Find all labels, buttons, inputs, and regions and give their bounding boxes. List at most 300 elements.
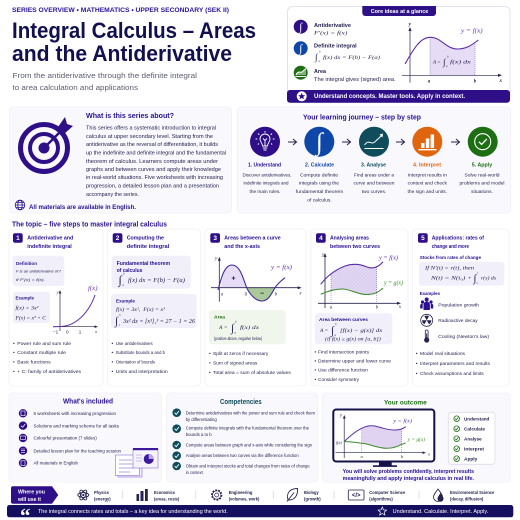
chart: area between curves	[318, 253, 403, 310]
outcome statement: You will solve problems confidently, interpret results	[343, 469, 474, 475]
panel: competencies	[166, 393, 318, 482]
key points list: •	[416, 372, 418, 377]
key points list	[314, 350, 391, 383]
card title: definite integral	[127, 244, 170, 250]
stocks formula box: ∫	[472, 274, 478, 284]
subtitle: From the antiderivative through the definite integral	[12, 73, 198, 80]
key points list: Constant multiple rule	[17, 350, 66, 356]
example box	[111, 294, 196, 328]
icon: antiderivative	[294, 20, 308, 34]
stocks formula box	[419, 262, 504, 286]
example box: ∫	[114, 316, 119, 328]
step 3: analyse	[354, 127, 395, 194]
icon: globe	[15, 200, 25, 210]
panel: core ideas at a glance	[287, 6, 510, 103]
key points list: Total area = sum of absolute values	[213, 370, 291, 376]
checklist: Interpret	[464, 446, 484, 451]
use: computer science	[348, 490, 406, 502]
subtitle: to area calculation and applications	[12, 85, 139, 92]
outcome statement: meaningfully and apply integral calculus in real life.	[343, 476, 475, 482]
monitor with area chart: f(a)	[336, 440, 342, 445]
card title: Antiderivative and	[27, 236, 73, 242]
header: series label, title and subtitle	[12, 8, 256, 92]
step 1: understand: indefinite integrals and	[244, 181, 289, 186]
use: environmental science: (decay, diffusion)	[450, 497, 484, 502]
card title: indefinite integral	[27, 244, 72, 250]
area text: Area	[314, 69, 326, 75]
chart: signed area: +	[231, 276, 236, 282]
step 4: interpret	[408, 127, 448, 194]
use: biology: (growth)	[304, 497, 321, 502]
card title: Computing the	[127, 236, 164, 242]
card title	[27, 236, 73, 250]
checklist: Apply	[464, 456, 478, 461]
step 5: apply	[460, 127, 504, 194]
badge 2: 2	[116, 235, 120, 242]
pennant: where you will use it: Where you	[18, 490, 45, 496]
included item: lesson plan	[19, 446, 121, 455]
step 2: calculate: ∫	[314, 129, 324, 157]
badge 3	[210, 233, 220, 243]
chart: antiderivative curve	[53, 285, 98, 334]
badge 5	[418, 233, 428, 243]
area box: Area	[214, 315, 225, 321]
series description: theorem of calculus. Learners compute areas under	[86, 159, 218, 165]
step 3: analyse: Find areas under a	[354, 173, 395, 178]
step 5: apply: problems and model	[460, 181, 504, 186]
key points list	[209, 351, 291, 376]
icon: definite integral: ∫	[298, 43, 303, 55]
antiderivative text: Antiderivative	[314, 23, 351, 29]
chart: area between curves: x	[398, 305, 402, 310]
stocks formula box: t₀	[476, 280, 478, 284]
competency text: bounds a to b	[186, 432, 212, 437]
panel: learning journey	[238, 107, 510, 213]
key points list: Check assumptions and limits	[420, 371, 484, 377]
area box: f(x) dx	[240, 324, 260, 331]
competency text: by differentiating	[186, 417, 217, 422]
key points list: •	[13, 360, 15, 366]
key points list: •	[209, 362, 211, 367]
use: economics: Economics	[154, 490, 176, 495]
included item: worksheets	[19, 409, 116, 417]
antiderivative text: F′(x) = f(x)	[313, 30, 347, 37]
pennant: where you will use it	[11, 486, 58, 504]
key points list: •	[112, 360, 114, 366]
example: cooling: Cooling (Newton's law)	[438, 334, 489, 340]
key points list: •	[416, 352, 418, 357]
key points list: Orientation of bounds	[116, 360, 155, 366]
included item: lesson plan: Detailed lesson plan for the teaching session	[34, 448, 121, 453]
key points list: •	[13, 342, 15, 347]
step 1: understand	[242, 127, 292, 194]
area box: b	[235, 320, 237, 324]
badge 3: 3	[213, 235, 217, 242]
series description: This series offers a systematic introduction to integral	[86, 126, 216, 132]
check icons	[172, 408, 181, 470]
pennant: where you will use it: will use it	[17, 497, 41, 503]
stocks formula box: r(s) ds	[481, 275, 496, 282]
use: computer science: </>	[352, 493, 361, 499]
key points list: Substitute bounds a and b	[116, 350, 165, 356]
monitor with area chart	[333, 410, 434, 467]
key points list: •	[314, 378, 316, 383]
included item: english	[19, 459, 78, 467]
definition box: F is an antiderivative of f	[16, 269, 61, 274]
chart: signed area: −	[260, 290, 264, 298]
icon: antiderivative: ∫	[298, 22, 303, 34]
slogan band: Understand concepts. Master tools. Apply in context.	[314, 94, 465, 100]
chart: antiderivative curve: −1	[53, 330, 59, 334]
fundamental theorem box: b	[123, 272, 125, 276]
chart: antiderivative curve: 1	[79, 330, 82, 334]
outcome statement	[343, 469, 475, 482]
area box: A =	[218, 325, 228, 331]
card title: Analysing areas	[330, 236, 369, 242]
core ideas heading tab: Core ideas at a glance	[371, 9, 428, 15]
card title: between two curves	[330, 244, 380, 250]
key points list: Units and interpretation	[116, 369, 168, 375]
monitor with area chart: x	[427, 452, 430, 456]
monitor with area chart: y	[339, 414, 343, 418]
area between curves box: a	[334, 333, 336, 337]
monitor with area chart: y = f(x)	[392, 418, 412, 424]
competency text: in context	[186, 470, 203, 475]
checklist: Analyse	[464, 436, 482, 441]
example box: Example	[16, 296, 34, 301]
step 5: apply: situations.	[471, 189, 493, 194]
checklist: Calculate	[464, 426, 485, 431]
fundamental theorem box: Fundamental theorem	[117, 261, 171, 267]
area box: a	[234, 330, 236, 334]
use: environmental science	[434, 489, 495, 502]
antiderivative text	[313, 23, 351, 37]
definition box: Definition	[16, 261, 37, 266]
use: biology: Biology	[304, 490, 319, 495]
step 2: calculate: 2. Calculate	[305, 163, 334, 169]
key points list: •	[314, 360, 316, 364]
key points list: •	[209, 371, 211, 376]
badge 1: 1	[16, 235, 20, 242]
key points list: + C: family of antiderivatives	[17, 369, 82, 375]
series description: accompany the series.	[86, 192, 139, 198]
card 4: analysing areas between two curves	[311, 229, 408, 386]
chart: area between curves: y = g(x)	[383, 280, 403, 286]
checklist: Understand	[464, 416, 489, 421]
definition box	[12, 256, 64, 286]
definite integral text: a	[318, 59, 320, 63]
definite integral text: Definite integral	[314, 44, 357, 50]
key points list: •	[314, 350, 316, 356]
example: population growth	[420, 298, 479, 310]
key points list: Determine upper and lower curve	[318, 358, 391, 364]
chart: area under curve: y	[408, 22, 412, 28]
card 2: computing the definite integral	[108, 229, 200, 386]
arrow	[451, 139, 460, 145]
key points list: Find intersection points	[318, 350, 370, 356]
series label: SERIES OVERVIEW • MATHEMATICS • UPPER SECONDARY (SEK II)	[12, 8, 229, 14]
chart: area under curve: ∫	[442, 57, 447, 68]
illustration: documents and slide	[116, 448, 158, 477]
key points list: Split at zeros if necessary	[213, 351, 269, 357]
use: engineering: Engineering	[229, 490, 253, 495]
chart: signed area: y	[214, 256, 218, 262]
heading: competencies: Competencies	[220, 399, 262, 406]
title	[12, 18, 256, 66]
competency text: Compute areas between graph and x-axis while considering the sign	[186, 443, 312, 448]
quote text: The integral connects rates and totals – a key idea for understanding the world.	[38, 509, 228, 515]
definition box: if F′(x) = f(x).	[16, 277, 45, 282]
key points list: •	[13, 351, 15, 356]
area between curves box: A =	[319, 328, 329, 334]
chart: area under curve: b	[474, 80, 477, 84]
badge 4	[316, 233, 326, 243]
divider	[418, 491, 420, 499]
english note: All materials are available in English.	[29, 205, 136, 211]
chart: signed area: b	[275, 292, 278, 298]
key points list: •	[112, 342, 114, 347]
key points list: Basic functions	[17, 360, 51, 366]
included item: english: All materials in English	[34, 461, 78, 466]
example box: f(x) = 3x², F(x) = x³	[116, 306, 165, 313]
heading: what's included: What's included	[63, 399, 113, 406]
use: computer science: (algorithms)	[369, 497, 393, 502]
monitor with area chart: b	[401, 454, 404, 459]
heading: learning journey: Your learning journey – step by step	[303, 112, 421, 122]
step 1: understand: the main rules.	[250, 189, 280, 194]
chart: antiderivative curve: f(x)	[88, 285, 98, 292]
definite integral text	[314, 44, 380, 63]
closing slogan: Understand. Calculate. Interpret. Apply.	[393, 509, 488, 515]
fundamental theorem box: ∫	[118, 273, 122, 287]
divider	[333, 491, 335, 499]
step 4: interpret: 4. Interpret	[413, 163, 441, 169]
card 5: applications	[412, 229, 509, 386]
use: physics	[78, 489, 111, 502]
step 2: calculate: of calculus.	[307, 197, 332, 202]
use: engineering	[212, 490, 260, 502]
step 3: analyse: curve and between	[354, 181, 395, 186]
use: environmental science: Environmental Science	[450, 490, 495, 495]
card title: Applications: rates of	[432, 236, 484, 242]
example: cooling	[424, 330, 489, 343]
use: economics	[136, 489, 180, 502]
use: computer science: Computer Science	[369, 490, 406, 495]
heading: what is this series about: What is this series about?	[86, 111, 174, 120]
key points list: •	[13, 370, 15, 375]
key points list: •	[112, 370, 114, 375]
example: radioactive decay: Radioactive decay	[438, 318, 478, 324]
example box	[13, 292, 50, 323]
chart: signed area	[211, 256, 302, 302]
icon: star	[378, 507, 386, 515]
step 2: calculate: integrals using the	[299, 181, 340, 186]
area text	[314, 69, 396, 83]
fundamental theorem box	[112, 256, 191, 289]
slogan band	[287, 90, 510, 103]
area box: ∫	[230, 322, 235, 334]
card title	[224, 236, 281, 250]
subtitle	[12, 73, 198, 92]
panel: your outcome	[322, 393, 510, 482]
step 3: analyse: two curves.	[362, 189, 386, 194]
use: biology	[287, 488, 321, 502]
arrow	[396, 139, 404, 145]
examples heading: Examples	[420, 291, 440, 297]
area box	[209, 310, 286, 344]
key points list: Use antiderivatives	[116, 341, 153, 347]
key points list: Sum of signed areas	[213, 361, 258, 367]
key points list: Consider symmetry	[318, 377, 360, 383]
series description: graphs and between curves and apply their knowledge	[86, 167, 221, 173]
title: and the Antiderivative	[12, 41, 232, 66]
key points list	[416, 351, 491, 377]
definite integral text: f(x) dx = F(b) − F(a)	[323, 54, 380, 61]
stocks formula box: If N′(t) = r(t), then	[424, 265, 474, 272]
chart: area under curve: b	[447, 54, 449, 58]
example box: Example	[116, 299, 136, 304]
competency text: Determine antiderivatives with the power and sum rule and check them	[186, 410, 315, 415]
example box: 3x² dx = [x³]₁³ = 27 − 1 = 26	[122, 319, 195, 325]
badge 5: 5	[421, 235, 425, 242]
step 2: calculate: Compute definite	[300, 173, 339, 178]
competency text: Obtain and interpret stocks and total changes from rates of change	[186, 463, 310, 468]
chart: signed area: a	[221, 292, 224, 298]
area between curves box: [f(x) − g(x)] dx	[340, 327, 383, 334]
icon: target with arrow	[20, 117, 73, 172]
included item: presentation: Colourful presentation (7 slides)	[34, 436, 97, 441]
step 4: interpret: the sign and units.	[408, 189, 447, 194]
stocks formula box: t	[477, 270, 478, 274]
competency text: Compute definite integrals with the fundamental theorem over the	[186, 426, 309, 431]
panel: what's included	[9, 393, 162, 482]
example box: 1	[118, 323, 120, 327]
divider	[122, 491, 124, 499]
stocks heading: Stocks from rates of change	[420, 255, 481, 261]
key points list: •	[209, 352, 211, 357]
key points list: •	[314, 368, 316, 374]
area between curves box	[315, 313, 392, 344]
key points list: •	[112, 351, 114, 356]
chart: area between curves: y	[321, 253, 325, 258]
chart: area under curve: y = f(x)	[460, 28, 483, 35]
panel: what is this series about	[10, 107, 232, 213]
divider	[194, 491, 196, 499]
included item: solutions: Solutions and marking scheme for all tasks	[34, 423, 120, 428]
card title	[330, 236, 380, 250]
chart: area under curve	[402, 22, 502, 84]
step 1: understand: 1. Understand	[248, 163, 281, 169]
divider	[272, 491, 274, 499]
chart: antiderivative curve: 0	[66, 330, 69, 334]
step 5: apply: Solve real-world	[464, 173, 500, 178]
area text: The integral gives (signed) area.	[314, 77, 396, 83]
area between curves box: ∫	[330, 325, 335, 337]
use: physics: (energy)	[94, 497, 111, 502]
step 4: interpret: Interpret results in	[408, 173, 447, 178]
series description: calculus at upper secondary level. Starting from the	[86, 134, 213, 140]
core ideas heading tab	[362, 6, 436, 16]
chart: signed area: y = f(x)	[270, 264, 292, 271]
section heading: the topic: The topic – five steps to master integral calculus	[12, 220, 167, 229]
badge 1	[13, 233, 23, 243]
icon: area	[294, 66, 308, 80]
example box: f(x) = 3x²	[16, 305, 39, 312]
heading: your outcome: Your outcome	[384, 400, 427, 407]
fundamental theorem box: a	[122, 283, 124, 287]
chart: area under curve: a	[446, 64, 448, 68]
series description: in real-world situations. Five worksheets with increasing	[86, 175, 223, 181]
card 1: antiderivative and indefinite integral	[9, 229, 103, 386]
key points list: Power rule and sum rule	[17, 341, 71, 347]
series description: antiderivative as the reversal of differentiation, it builds	[86, 142, 218, 148]
use: economics: (areas, costs)	[154, 497, 180, 502]
step 2: calculate	[296, 127, 344, 202]
card title: change and more	[432, 244, 469, 250]
area between curves box: (if f(x) ≥ g(x) on [a, b])	[325, 337, 381, 342]
chart: antiderivative curve: y	[56, 290, 58, 294]
use: physics: Physics	[94, 490, 110, 495]
example: population growth: Population growth	[438, 302, 479, 308]
chart: area between curves: y = f(x)	[378, 254, 398, 261]
chart: area between curves: b	[376, 306, 379, 310]
chart: area under curve: a	[428, 80, 431, 84]
arrow	[288, 139, 296, 145]
chart: signed area: 0	[245, 292, 248, 298]
area between curves box: Area between curves	[319, 317, 368, 323]
key points list: Use difference function	[318, 368, 368, 374]
card 3: areas between a curve and the x-axis	[205, 229, 306, 386]
competency text: Analyse areas between two curves via the difference function	[186, 453, 299, 458]
included item: worksheets: 5 worksheets with increasing progression	[34, 411, 116, 416]
card title: and the x-axis	[224, 244, 260, 250]
series description	[86, 126, 226, 198]
chart: area under curve: f(x) dx	[450, 60, 472, 66]
step 3: analyse: 3. Analyse	[361, 163, 386, 169]
key points list	[112, 341, 168, 375]
area box: (positive above, negative below)	[214, 336, 262, 341]
included item: presentation	[19, 434, 97, 442]
key points list: •	[416, 362, 418, 367]
competency text	[186, 410, 315, 475]
checklist	[448, 412, 495, 464]
example box: 3	[119, 313, 121, 317]
fundamental theorem box: of calculus	[117, 268, 143, 274]
key points list: Interpret parameters and results	[420, 361, 491, 367]
area between curves box: b	[335, 322, 337, 326]
stocks formula box: N(t) = N(t₀) +	[430, 275, 472, 282]
step 1: understand: Discover antiderivatives,	[242, 173, 292, 178]
series description: up the indefinite and definite integral and the fundamental	[86, 151, 226, 157]
badge 4: 4	[319, 235, 323, 242]
example: radioactive decay	[421, 314, 478, 326]
step 4: interpret: context and check	[408, 181, 448, 186]
step 5: apply: 5. Apply	[472, 163, 492, 169]
monitor with area chart: a	[361, 454, 364, 459]
use: engineering: (volumes, work)	[229, 497, 260, 502]
definite integral text: b	[319, 50, 321, 54]
chart: area under curve: A =	[432, 60, 441, 66]
chart: area between curves: a	[330, 306, 333, 310]
chart: area under curve: x	[498, 79, 502, 84]
card title	[432, 236, 484, 250]
key points list: Model real situations	[420, 351, 466, 357]
title: Integral Calculus – Areas	[12, 18, 256, 43]
badge 2	[113, 233, 122, 243]
example box: F(x) = x³ + C	[14, 314, 46, 321]
fundamental theorem box: f(x) dx = F(b) − F(a)	[128, 277, 185, 284]
step 2: calculate: fundamental theorem	[296, 189, 344, 194]
